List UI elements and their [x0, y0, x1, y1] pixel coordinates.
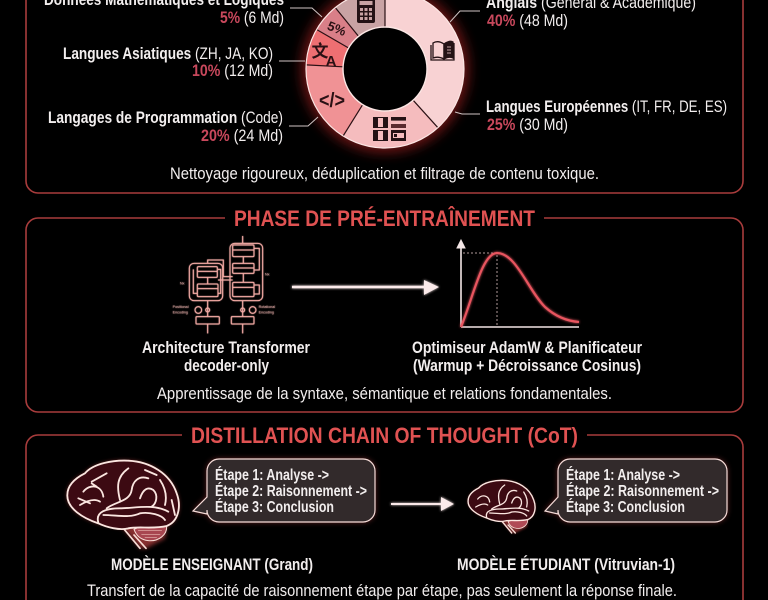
panel: dataset composition	[26, 0, 743, 193]
label: mathematics	[44, 0, 284, 27]
callout: teacher reasoning steps: Étape 2: Raisonnement ->	[215, 483, 367, 500]
label: asian languages: Langues Asiatiques (ZH, JA, KO)	[63, 45, 273, 63]
label: optimizer	[412, 339, 642, 375]
caption: distillation: Transfert de la capacité de raisonnement étape par étape, pas seulement la réponse finale.	[87, 582, 677, 600]
label: asian languages: 10% (12 Md)	[192, 62, 273, 80]
label: english	[486, 0, 696, 30]
label: programming languages: Langages de Programmation (Code)	[48, 109, 283, 127]
panel: chain of thought distillation	[26, 423, 743, 600]
label: teacher model: MODÈLE ENSEIGNANT (Grand)	[111, 555, 313, 574]
label: 5%: 5%	[325, 18, 349, 39]
callout: student reasoning steps: Étape 1: Analyse ->	[566, 467, 680, 484]
diagram: transformer architecture: Encoding	[173, 310, 188, 314]
heading: distillation: DISTILLATION CHAIN OF THOUGHT (CoT)	[191, 423, 578, 448]
label: architecture	[142, 339, 310, 375]
icon: translation	[312, 41, 337, 70]
label: student model: MODÈLE ÉTUDIANT (Vitruvian-1)	[457, 555, 675, 574]
arrow: teacher to student	[391, 497, 454, 511]
label: optimizer: (Warmup + Décroissance Cosinus)	[413, 357, 641, 375]
label: programming languages	[48, 109, 283, 145]
leader lines	[279, 8, 480, 126]
label: programming languages: 20% (24 Md)	[201, 127, 283, 145]
label: architecture: Architecture Transformer	[142, 339, 310, 357]
chart: learning rate schedule	[457, 240, 579, 327]
callout: teacher reasoning steps	[193, 459, 375, 522]
diagram: transformer architecture: Encoding	[259, 310, 274, 314]
callout: teacher reasoning steps: Étape 3: Conclusion	[215, 499, 334, 516]
label: english: 40% (48 Md)	[487, 12, 568, 30]
diagram: transformer architecture: Rotational	[259, 305, 275, 309]
label: asian languages	[63, 45, 273, 80]
callout: student reasoning steps: Étape 3: Conclusion	[566, 499, 685, 516]
heading: pre-training: PHASE DE PRÉ-ENTRAÎNEMENT	[234, 206, 535, 231]
icon: code: </>	[319, 90, 345, 112]
label: architecture: decoder-only	[184, 357, 270, 375]
icon: translation: 文	[312, 41, 328, 61]
icon: translation: A	[326, 53, 337, 70]
caption: data cleaning: Nettoyage rigoureux, déduplication et filtrage de contenu toxique.	[170, 165, 599, 183]
icon: european flags	[373, 117, 406, 141]
diagram: transformer architecture: Nx	[180, 282, 185, 286]
label: european languages: Langues Européennes (IT, FR, DE, ES)	[486, 98, 727, 116]
callout: teacher reasoning steps: Étape 1: Analyse ->	[215, 467, 329, 484]
icon: open book	[431, 41, 454, 60]
icon: student brain	[468, 480, 535, 533]
caption: pre-training: Apprentissage de la syntaxe, sémantique et relations fondamentales.	[157, 385, 612, 403]
diagram: transformer architecture: Positional	[173, 305, 189, 309]
callout: student reasoning steps: Étape 2: Raisonnement ->	[566, 483, 719, 500]
label: european languages: 25% (30 Md)	[487, 116, 568, 134]
icon: teacher brain	[67, 461, 179, 548]
callout: student reasoning steps	[545, 459, 727, 522]
label: optimizer: Optimiseur AdamW & Planificateur	[412, 339, 642, 357]
arrow: to optimizer	[292, 280, 439, 295]
chart: dataset donut	[301, 0, 469, 153]
icon: calculator	[357, 0, 375, 23]
label: european languages	[486, 98, 727, 134]
diagram: transformer architecture: Nx	[265, 272, 270, 276]
label: mathematics: 5% (6 Md)	[220, 9, 284, 27]
panel: pre-training	[26, 206, 743, 412]
diagram: transformer architecture	[173, 236, 275, 333]
